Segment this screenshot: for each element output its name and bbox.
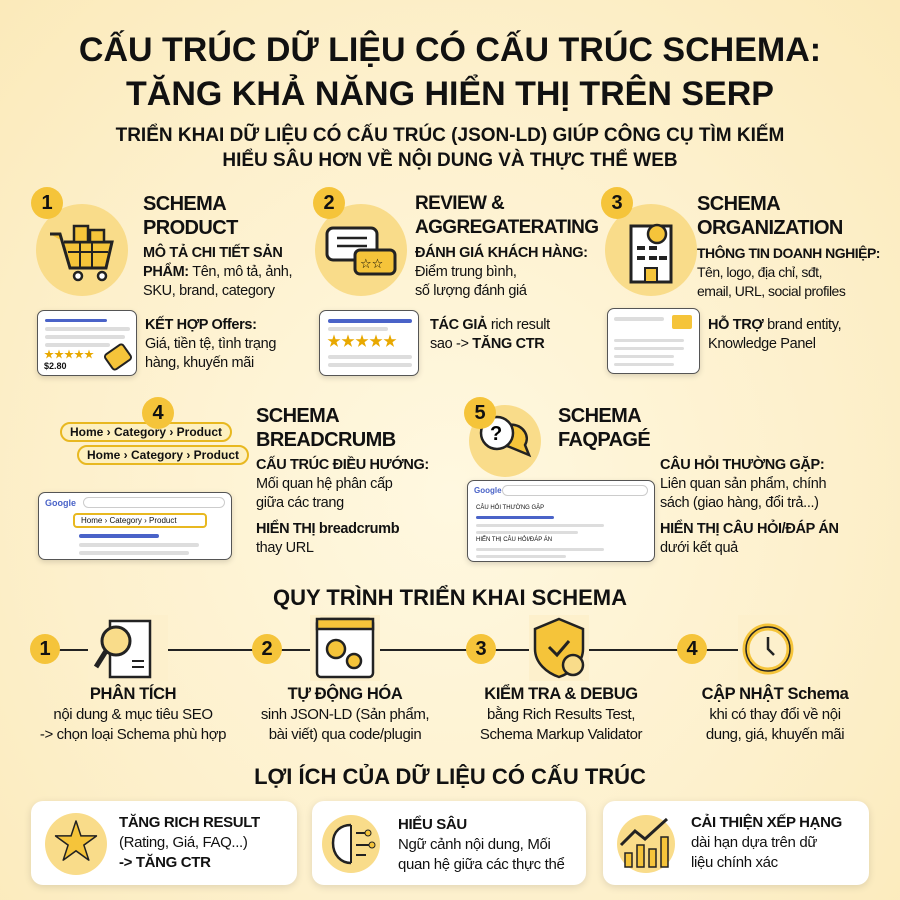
benefit card: ranking: liệu chính xác xyxy=(691,854,778,871)
badge 5: 5 xyxy=(474,402,486,424)
panel: breadcrumb xyxy=(36,397,429,564)
step 3: 3 xyxy=(475,638,487,660)
step 2 xyxy=(252,615,429,743)
title: CẤU TRÚC DỮ LIỆU CÓ CẤU TRÚC SCHEMA: xyxy=(79,31,821,69)
badge 2: 2 xyxy=(323,192,335,214)
card: knowledge panel xyxy=(607,308,700,374)
benefit card: ranking xyxy=(603,801,869,885)
breadcrumb pills: Home › Category › Product xyxy=(70,425,222,439)
step 4: khi có thay đổi về nội xyxy=(709,706,841,723)
display text xyxy=(660,520,839,556)
offers text xyxy=(145,316,276,371)
description xyxy=(415,244,588,299)
rich result text xyxy=(430,316,550,352)
benefit card: ranking: dài hạn dựa trên dữ xyxy=(691,834,817,851)
description: số lượng đánh giá xyxy=(415,283,527,299)
icon: building xyxy=(605,204,697,296)
heading: process: QUY TRÌNH TRIỂN KHAI SCHEMA xyxy=(273,585,627,610)
step 1: 1 xyxy=(39,638,51,660)
badge 2 xyxy=(313,187,345,219)
card: google breadcrumb: Home › Category › Product xyxy=(81,516,177,525)
icon: growth chart xyxy=(617,815,675,873)
heading xyxy=(256,405,396,451)
heading: SCHEMA xyxy=(697,193,780,215)
benefit card: rich result xyxy=(31,801,297,885)
description xyxy=(697,245,880,299)
description xyxy=(256,456,429,511)
step 4: 4 xyxy=(686,638,698,660)
badge 3 xyxy=(601,187,633,219)
description: sách (giao hàng, đổi trả...) xyxy=(660,495,819,511)
step 2: TỰ ĐỘNG HÓA xyxy=(288,685,402,703)
heading: SCHEMA xyxy=(558,405,641,427)
icon: shield check xyxy=(529,615,589,681)
card: product result xyxy=(37,310,137,376)
description: Mối quan hệ phân cấp xyxy=(256,476,392,492)
heading: benefits: LỢI ÍCH CỦA DỮ LIỆU CÓ CẤU TRÚC xyxy=(254,764,646,789)
description: MÔ TẢ CHI TIẾT SẢN xyxy=(143,245,283,261)
card: faq result xyxy=(467,480,655,562)
panel: review xyxy=(313,187,598,380)
benefit card: deep understanding: quan hệ giữa các thực thể xyxy=(398,856,564,873)
description: CÂU HỎI THƯỜNG GẶP: xyxy=(660,457,824,473)
description: Điểm trung bình, xyxy=(415,264,517,280)
step 3: bằng Rich Results Test, xyxy=(487,706,635,723)
heading: FAQPAGÉ xyxy=(558,429,650,451)
subtitle: HIỂU SÂU HƠN VỀ NỘI DUNG VÀ THỰC THỂ WEB xyxy=(222,150,678,171)
description: CẤU TRÚC ĐIỀU HƯỚNG: xyxy=(256,457,429,473)
icon: star xyxy=(45,813,107,875)
brand entity text: HỖ TRỢ brand entity, xyxy=(708,317,841,333)
panel: faq xyxy=(464,397,839,566)
step 1: PHÂN TÍCH xyxy=(90,685,176,703)
badge 1: 1 xyxy=(41,192,53,214)
brand entity text: Knowledge Panel xyxy=(708,336,816,352)
offers text: KẾT HỢP Offers: xyxy=(145,317,257,333)
brand entity text xyxy=(708,316,841,352)
offers text: hàng, khuyến mãi xyxy=(145,355,254,371)
display text: dưới kết quả xyxy=(660,540,738,556)
card: faq result: CÂU HỎI THƯỜNG GẶP xyxy=(476,505,544,511)
heading: REVIEW & xyxy=(415,193,504,214)
card: google breadcrumb: Google xyxy=(45,498,76,508)
icon: review bubbles xyxy=(315,204,407,296)
heading xyxy=(697,193,843,239)
benefit card: rich result: TĂNG RICH RESULT xyxy=(119,814,260,831)
display text: thay URL xyxy=(256,540,314,556)
description: giữa các trang xyxy=(256,495,344,511)
icon: analyze xyxy=(88,615,168,681)
description: Liên quan sản phẩm, chính xyxy=(660,476,826,492)
description: Tên, logo, địa chỉ, sđt, xyxy=(697,264,822,280)
rich result text: sao -> TĂNG CTR xyxy=(430,336,544,352)
card: faq result: HIỂN THỊ CÂU HỎI/ĐÁP ÁN xyxy=(476,537,552,543)
heading: ORGANIZATION xyxy=(697,217,843,239)
breadcrumb pills: Home › Category › Product xyxy=(87,448,239,462)
panel: schema product xyxy=(31,187,292,380)
subtitle: TRIỂN KHAI DỮ LIỆU CÓ CẤU TRÚC (JSON-LD) GIÚP CÔNG CỤ TÌM KIẾM xyxy=(116,125,784,146)
step 1: nội dung & mục tiêu SEO xyxy=(53,706,213,723)
badge 4: 4 xyxy=(152,402,164,424)
step 1 xyxy=(30,620,226,743)
badge 3: 3 xyxy=(611,192,623,214)
card: product result: $2.80 xyxy=(44,361,67,371)
card: google breadcrumb xyxy=(38,492,232,560)
icon: question bubbles: ? xyxy=(490,423,502,445)
step 2: 2 xyxy=(261,638,273,660)
heading: BREADCRUMB xyxy=(256,429,396,451)
benefit card: rich result: -> TĂNG CTR xyxy=(119,854,211,871)
step 1: -> chọn loại Schema phù hợp xyxy=(40,726,226,743)
heading xyxy=(415,193,598,238)
step 2: sinh JSON-LD (Sản phẩm, xyxy=(261,706,429,723)
description xyxy=(143,244,292,299)
icon: brain xyxy=(322,815,380,873)
card: rating: ★★★★★ xyxy=(327,333,397,349)
step 4: dung, giá, khuyến mãi xyxy=(706,726,844,743)
display text: HIỂN THỊ CÂU HỎI/ĐÁP ÁN xyxy=(660,521,839,537)
icon: question bubbles xyxy=(469,405,541,477)
card: product result: ★★★★★ xyxy=(44,350,94,361)
icon: review bubbles: ☆☆ xyxy=(360,257,383,272)
step 4 xyxy=(677,624,849,743)
description: ĐÁNH GIÁ KHÁCH HÀNG: xyxy=(415,245,588,261)
icon: star: ★ xyxy=(54,818,98,867)
icon: shopping cart xyxy=(36,204,128,296)
benefit card: deep understanding xyxy=(312,801,586,885)
benefit card: rich result: (Rating, Giá, FAQ...) xyxy=(119,834,248,851)
rich result text: TÁC GIẢ rich result xyxy=(430,317,550,333)
heading: AGGREGATERATING xyxy=(415,217,598,238)
title: TĂNG KHẢ NĂNG HIỂN THỊ TRÊN SERP xyxy=(126,75,774,113)
description: THÔNG TIN DOANH NGHIỆP: xyxy=(697,245,880,261)
title xyxy=(79,30,821,113)
benefit card: deep understanding: Ngữ cảnh nội dung, Mối xyxy=(398,836,550,853)
display text xyxy=(256,520,399,556)
badge 5 xyxy=(464,397,496,429)
card: faq result: Google xyxy=(474,486,502,495)
icon: update cycle xyxy=(738,615,798,681)
benefit card: deep understanding: HIỂU SÂU xyxy=(398,816,467,833)
subtitle xyxy=(116,123,784,171)
heading xyxy=(143,193,238,239)
description: SKU, brand, category xyxy=(143,283,275,299)
step 4: CẬP NHẬT Schema xyxy=(702,685,848,703)
description: PHẨM: Tên, mô tả, ảnh, xyxy=(143,264,292,280)
panel: organization xyxy=(601,187,880,378)
description xyxy=(660,456,826,511)
step 3 xyxy=(466,615,642,743)
heading xyxy=(558,405,650,451)
benefit card: ranking: CẢI THIỆN XẾP HẠNG xyxy=(691,814,842,831)
icon: gears xyxy=(310,615,380,681)
heading: SCHEMA xyxy=(143,193,226,215)
badge 4 xyxy=(142,397,174,429)
step 2: bài viết) qua code/plugin xyxy=(269,726,421,743)
card: rating xyxy=(319,310,419,376)
process timeline xyxy=(30,615,849,743)
heading: PRODUCT xyxy=(143,217,238,239)
step 3: Schema Markup Validator xyxy=(480,726,642,743)
description: email, URL, social profiles xyxy=(697,283,845,299)
badge 1 xyxy=(31,187,63,219)
display text: HIỂN THỊ breadcrumb xyxy=(256,521,399,537)
step 3: KIỂM TRA & DEBUG xyxy=(484,685,638,703)
breadcrumb pills xyxy=(60,422,249,465)
offers text: Giá, tiền tệ, tình trạng xyxy=(145,336,276,352)
heading: SCHEMA xyxy=(256,405,339,427)
